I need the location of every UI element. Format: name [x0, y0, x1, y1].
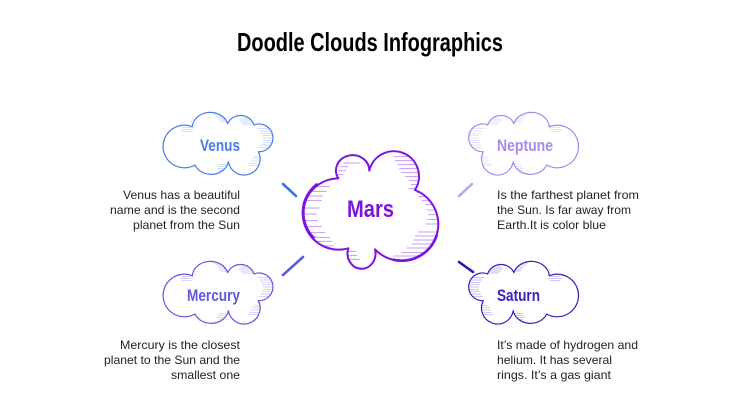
connector: Neptune to Mars	[459, 184, 472, 196]
text: Neptune description: the Sun. Is far away from	[497, 203, 631, 217]
icon: Saturn cloud	[465, 261, 579, 324]
text: Saturn description: helium. It has several	[497, 353, 612, 367]
text: Mercury description: smallest one	[171, 368, 240, 382]
label: Neptune: Neptune	[497, 136, 553, 155]
label: Venus: Venus	[200, 136, 240, 155]
text: Saturn description: It’s made of hydrogen and	[497, 338, 638, 352]
connector: Venus to Mars	[283, 184, 296, 196]
text: Neptune description: Earth.It is color blue	[497, 218, 606, 232]
text: Venus description: Venus has a beautiful	[123, 188, 240, 202]
label: Mercury: Mercury	[187, 286, 240, 305]
text: Neptune description: Is the farthest planet from	[497, 188, 639, 202]
title: Doodle Clouds Infographics	[237, 27, 503, 57]
connector: Saturn to Mars	[459, 262, 473, 272]
panel: Venus	[110, 112, 277, 232]
panel: Neptune	[465, 112, 639, 232]
icon: Mercury cloud	[163, 261, 277, 324]
text: Mercury description: planet to the Sun and the	[104, 353, 240, 367]
text: Venus description	[110, 188, 240, 232]
connector: Mercury to Mars	[283, 257, 303, 275]
panel: Mercury	[104, 261, 277, 382]
text: Saturn description: rings. It’s a gas giant	[497, 368, 612, 382]
text: Venus description: planet from the Sun	[133, 218, 240, 232]
panel: Saturn	[465, 261, 638, 382]
label: Saturn: Saturn	[497, 286, 540, 305]
text: Mercury description	[104, 338, 241, 382]
panel: Mars	[300, 151, 440, 269]
icon: Venus cloud	[163, 112, 277, 175]
text: Saturn description	[497, 338, 638, 382]
text: Venus description: name and is the second	[110, 203, 240, 217]
icon: Mars cloud	[300, 151, 440, 269]
icon: Neptune cloud	[465, 112, 579, 175]
text: Neptune description	[497, 188, 639, 232]
text: Mercury description: Mercury is the closest	[120, 338, 241, 352]
label: Mars: Mars	[347, 196, 394, 223]
